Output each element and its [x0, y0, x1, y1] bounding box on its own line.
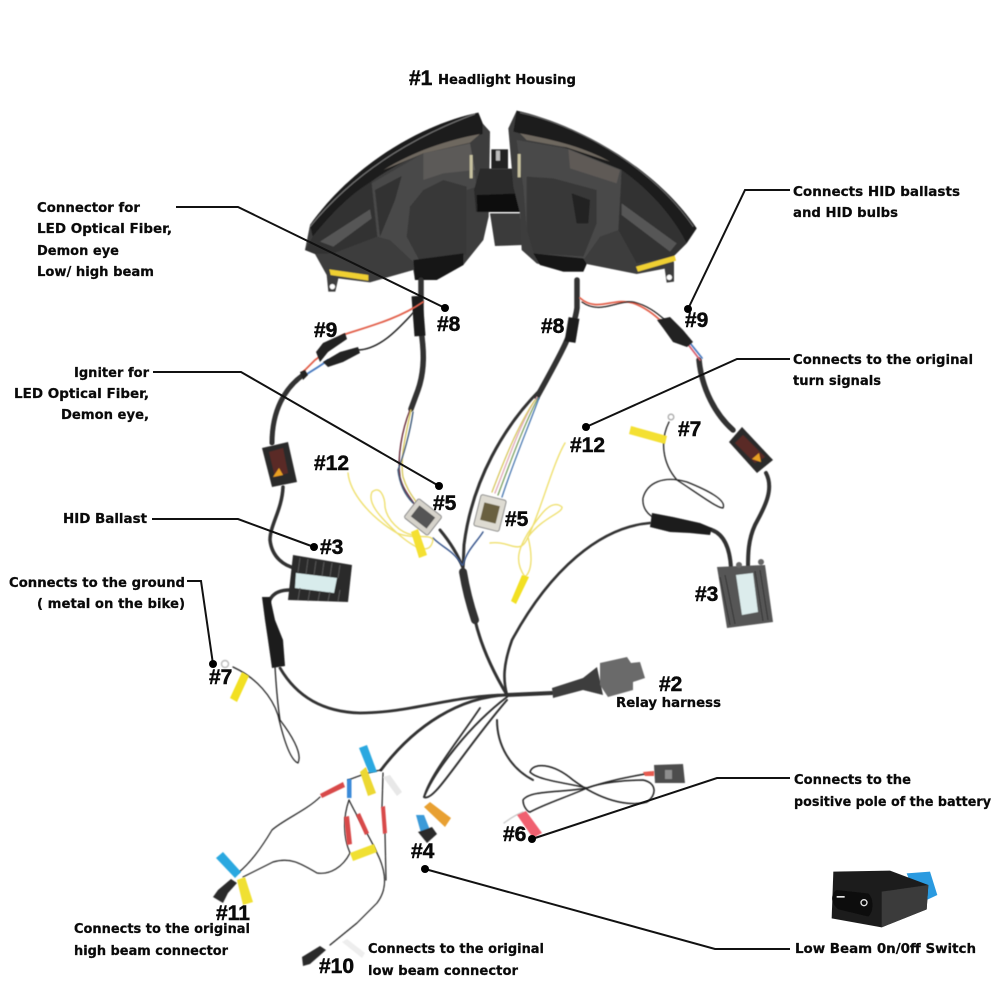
loom blue sleeve	[347, 779, 352, 798]
text: igniter	[14, 366, 150, 423]
left #9 wires	[303, 302, 423, 372]
right ballast lower lead	[748, 473, 769, 568]
part number labels	[209, 309, 718, 978]
cable from left connector to relay	[280, 668, 507, 713]
text: ground: ( metal on the bike)	[37, 597, 185, 612]
left ballast upper lead	[272, 375, 303, 443]
switch marks	[837, 896, 867, 906]
right lead connector	[570, 318, 574, 342]
text: high beam connector: high beam connector	[74, 944, 229, 959]
sleeve to relay junction	[475, 620, 507, 695]
part number labels: #7	[678, 418, 701, 441]
switch blue terminals	[907, 872, 937, 900]
text: original turn signals: Connects to the original	[793, 353, 973, 368]
cable to loom	[381, 695, 507, 770]
part number labels: #5	[433, 492, 457, 515]
left ring terminal	[222, 660, 228, 668]
title: #1 Headlight Housing	[409, 67, 576, 90]
loom yellow tag	[360, 767, 376, 796]
left ballast output lead	[268, 590, 290, 618]
title: #1 Headlight Housing: #1	[409, 67, 433, 90]
left bulb lead	[411, 280, 423, 409]
part number labels: #7	[209, 666, 232, 689]
text: ground: Connects to the ground	[9, 576, 185, 591]
part number labels: #6	[503, 823, 526, 846]
relay boot	[552, 667, 603, 698]
connector to right ballast	[712, 530, 731, 568]
photo: headlight housing	[305, 111, 697, 292]
left lead connector	[417, 296, 420, 336]
left igniter yellow tag	[411, 529, 427, 558]
part number labels: #4	[411, 840, 435, 863]
right control box	[729, 427, 773, 473]
text: low beam connector: Connects to the original	[368, 942, 544, 957]
relay body	[600, 657, 645, 697]
text: igniter: Demon eye,	[61, 408, 149, 423]
part number labels: #11	[216, 902, 250, 925]
left yellow wire #12	[348, 473, 433, 549]
photo: rocker switch	[832, 871, 937, 927]
text: high beam connector: Connects to the original	[74, 922, 250, 937]
part number labels: #10	[319, 955, 354, 978]
loom thin wires	[238, 770, 386, 945]
photo: components	[213, 317, 773, 966]
text: battery	[794, 773, 992, 810]
text: battery: Connects to the	[794, 773, 911, 788]
text: HID ballast: HID Ballast	[63, 512, 147, 527]
fine wires	[233, 298, 724, 945]
part number labels: #8	[437, 313, 461, 336]
left ballast body	[288, 555, 352, 602]
left headlight housing	[305, 113, 490, 292]
left colored wires to igniter	[398, 410, 417, 505]
part number labels: #12	[570, 434, 605, 457]
text: connector for optical fiber: LED Optical Fiber,	[37, 222, 172, 237]
part number labels: #8	[541, 315, 565, 338]
text: connector for optical fiber: Connector for	[37, 201, 141, 216]
left control box	[262, 442, 297, 487]
text: battery: positive pole of the battery	[794, 795, 992, 810]
part number labels: #9	[685, 309, 708, 332]
text: ground	[9, 576, 185, 612]
text: igniter: Igniter for	[74, 366, 150, 381]
fuse cable loop	[424, 697, 507, 798]
switch side	[882, 885, 928, 927]
loom red terminals	[320, 782, 387, 845]
part number labels: #12	[314, 452, 349, 475]
left main connector	[262, 597, 285, 668]
text: igniter: LED Optical Fiber,	[14, 387, 149, 402]
right #12 yellow terminal	[511, 575, 529, 604]
fuse holder	[416, 815, 437, 843]
left ground wire loop	[233, 667, 299, 763]
main cables	[268, 280, 769, 798]
text: connector for optical fiber: Low/ high beam	[37, 265, 154, 280]
igniter to junction cable	[440, 530, 463, 568]
title: #1 Headlight Housing: Headlight Housing	[438, 73, 576, 88]
right headlight housing	[508, 111, 697, 283]
right yellow wire #12	[490, 443, 565, 577]
right #9 connectors	[657, 317, 693, 347]
relay trunk	[507, 693, 552, 695]
battery lead loop	[523, 766, 654, 812]
right trunk thin section	[463, 390, 540, 570]
part number labels: #3	[320, 536, 343, 559]
switch body	[832, 871, 928, 927]
right igniter module	[474, 494, 506, 532]
battery red tag	[517, 811, 542, 838]
text: connector for optical fiber	[37, 201, 172, 280]
merged sleeve	[463, 572, 475, 620]
left #7 yellow tag	[230, 672, 249, 702]
battery ring terminal	[504, 812, 523, 823]
part number labels: #5	[505, 508, 529, 531]
leader lines	[152, 190, 790, 949]
loom blue tag	[359, 745, 377, 773]
right ballast body	[717, 559, 773, 628]
right #7 ring terminal	[668, 414, 674, 420]
part number labels: #9	[314, 319, 337, 342]
fuse orange tag	[424, 802, 451, 827]
text: connects HID ballasts: and HID bulbs	[793, 206, 898, 221]
right #9 wires	[580, 298, 663, 323]
high beam connector	[213, 879, 237, 903]
battery fuse connector	[643, 764, 685, 783]
loom yellow sleeve	[350, 844, 377, 861]
part number labels: #2	[659, 673, 682, 696]
right #7 ground wire	[643, 422, 724, 518]
text: relay harness: Relay harness	[616, 696, 721, 711]
text: low beam connector: low beam connector	[368, 964, 519, 979]
low beam connector	[302, 946, 326, 966]
right bulb lead	[537, 280, 577, 397]
part number labels: #3	[695, 583, 718, 606]
center bracket	[474, 149, 524, 246]
loom white tag	[383, 775, 402, 796]
text: connector for optical fiber: Demon eye	[37, 244, 119, 259]
right #7 yellow tag	[629, 426, 667, 444]
text: original turn signals: turn signals	[793, 374, 881, 389]
low beam white tag	[342, 939, 365, 958]
text: connects HID ballasts	[793, 185, 960, 221]
text: high beam connector	[74, 922, 250, 959]
right main connector	[650, 513, 712, 535]
blue wires to junction	[433, 538, 462, 565]
text: original turn signals	[793, 353, 973, 389]
right ballast upper lead	[699, 360, 733, 430]
left #9 connectors	[300, 333, 360, 380]
high beam yellow tag	[237, 877, 253, 905]
text: switch: Low Beam 0n/0ff Switch	[795, 942, 976, 957]
battery lead start	[497, 720, 533, 780]
high beam blue tag	[216, 852, 241, 878]
left igniter module	[404, 498, 442, 536]
long cable from right connector to relay	[504, 523, 650, 695]
right colored wires	[492, 397, 539, 497]
left ballast lower lead	[270, 487, 295, 568]
text: connects HID ballasts: Connects HID ballasts	[793, 185, 960, 200]
text: low beam connector	[368, 942, 544, 979]
switch rocker	[832, 890, 873, 917]
